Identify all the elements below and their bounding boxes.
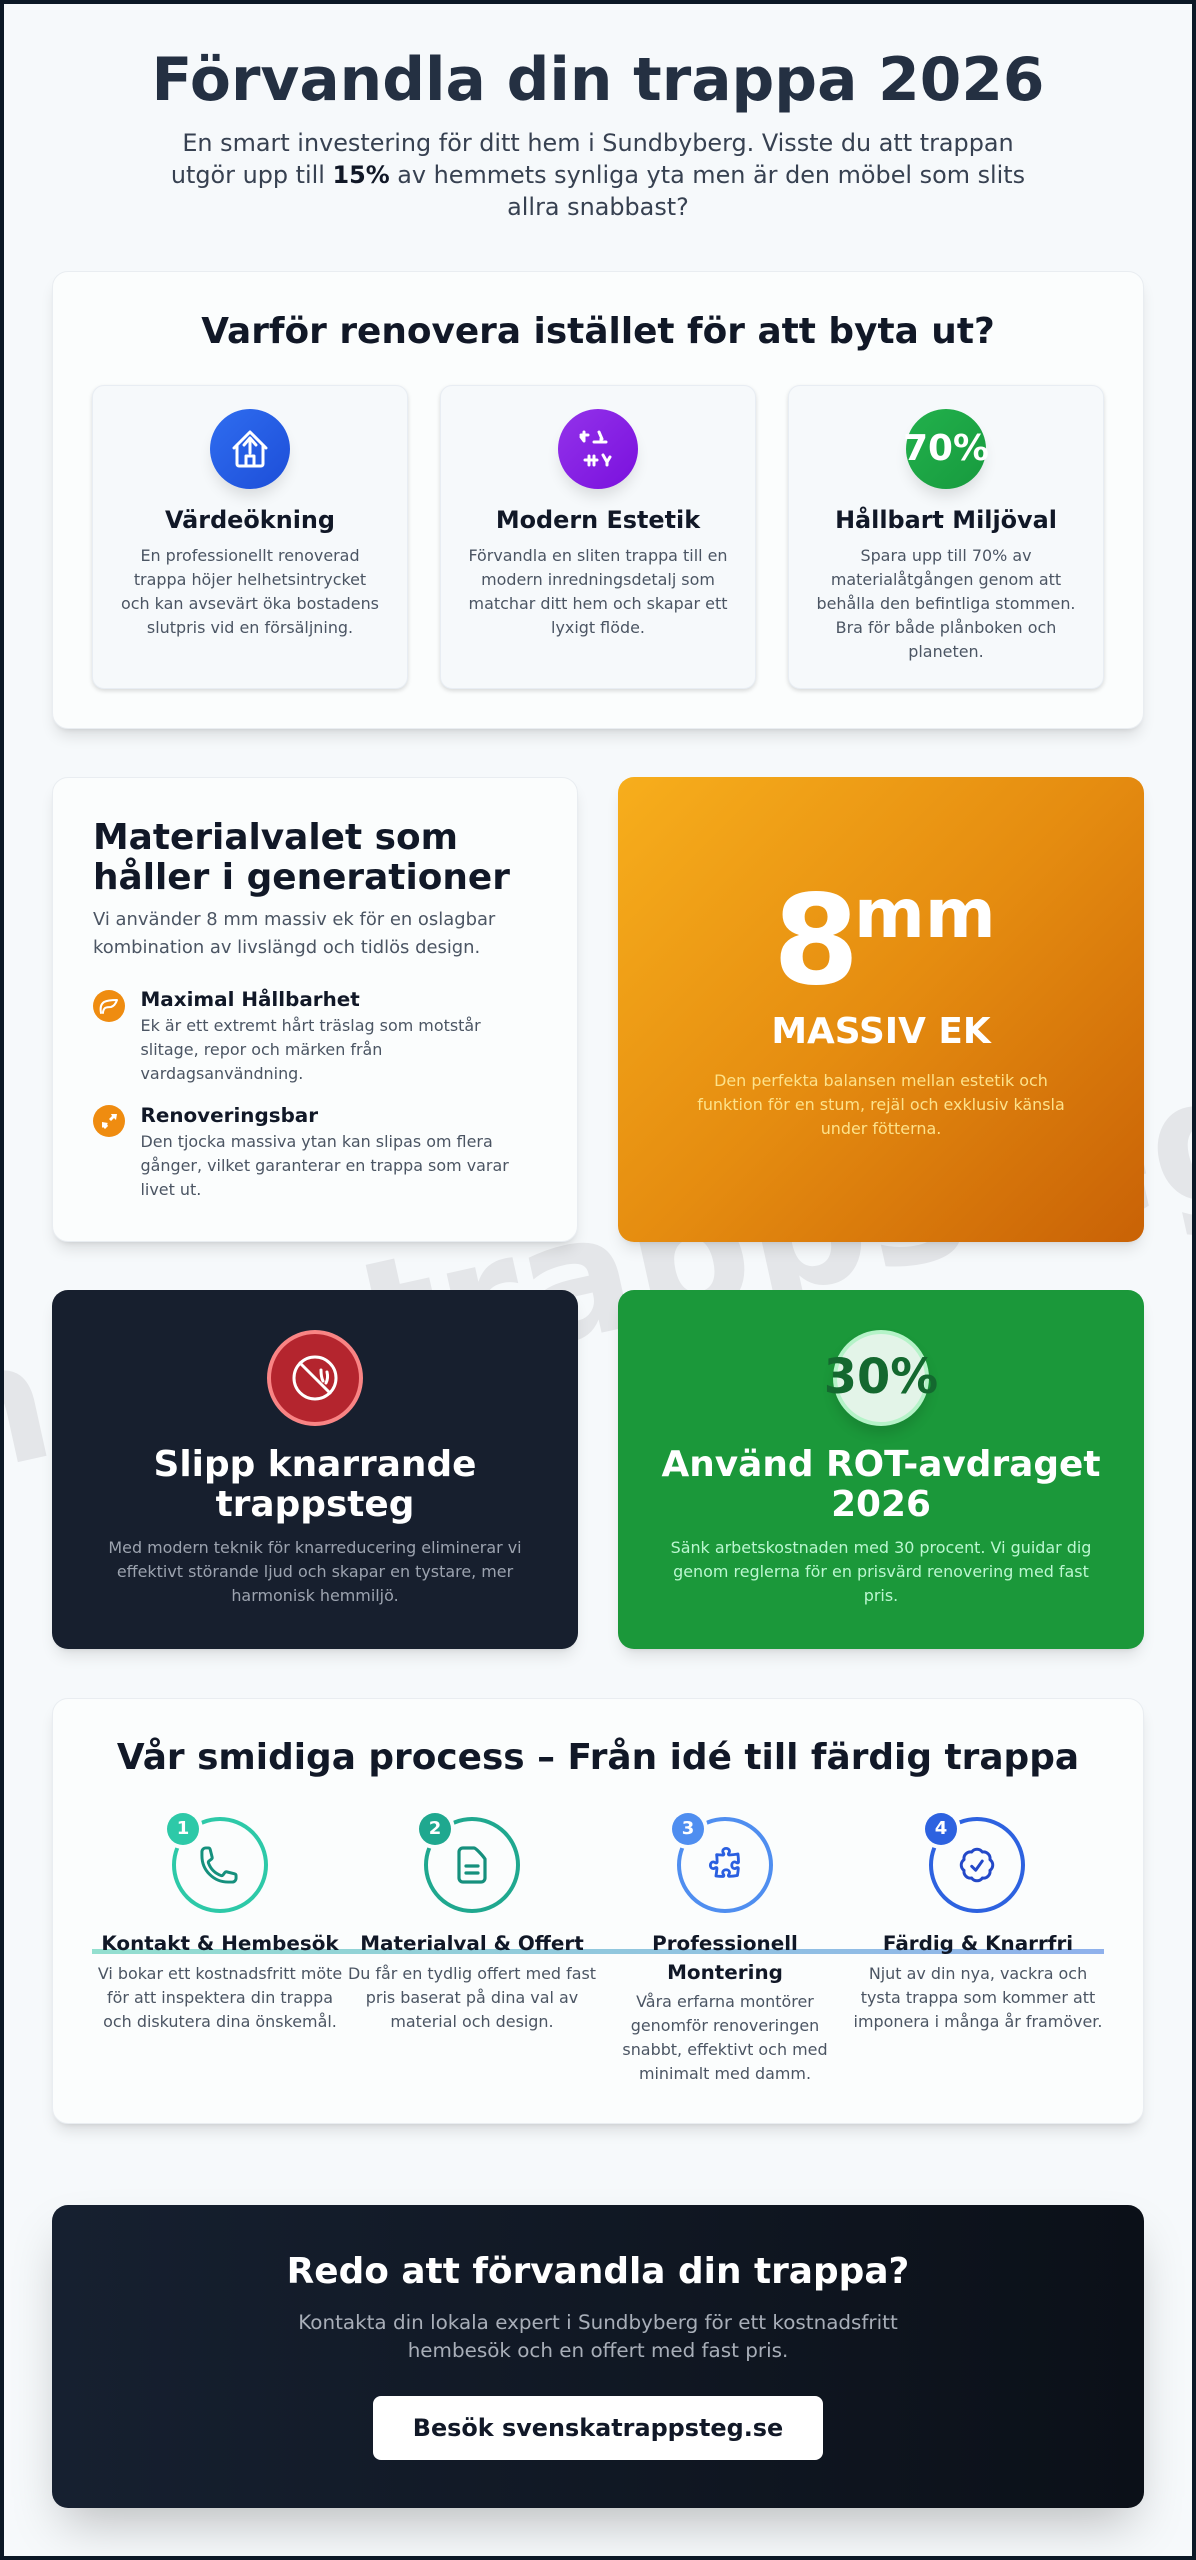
intro text: utgör upp till 15% av hemmets synliga yta men är den möbel som slits [171,161,1025,189]
card text: Bra för både plånboken och [836,618,1056,637]
icon: no squeak [267,1330,363,1426]
icon: 70 percent: 70% [903,428,989,469]
intro text: En smart investering för ditt hem i Sundbyberg. Visste du att trappan [182,129,1014,157]
icon: 30 percent [833,1330,929,1426]
card text: trappa höjer helhetsintrycket [134,570,366,589]
card title: Hållbart Miljöval [835,506,1057,534]
step 3 title [652,1932,798,1984]
feature text: renovatable: gånger, vilket garanterar en trappa som varar [140,1156,509,1175]
step 2 text: Du får en tydlig offert med fast [348,1964,596,1983]
heading: process: Vår smidiga process – Från idé till färdig trappa [117,1737,1079,1778]
feature text: durability [140,1016,481,1083]
card title: Slipp knarrande [154,1444,476,1485]
feature text: durability: Ek är ett extremt hårt träslag som motstår [140,1016,481,1035]
card text: harmonisk hemmiljö. [231,1586,399,1605]
intro text [171,129,1025,221]
card title: Värdeökning [165,506,335,534]
card text: planeten. [908,642,984,661]
step 4 text: imponera i många år framöver. [854,2012,1102,2031]
icon: durability [93,990,125,1022]
card text: Förvandla en sliten trappa till en [468,546,728,565]
step 3 text: genomför renoveringen [631,2016,819,2035]
step 3 ring [677,1817,773,1913]
step 3 title: Montering [667,1961,783,1984]
card text: Sänk arbetskostnaden med 30 procent. Vi guidar dig [671,1538,1091,1557]
card text: slutpris vid en försäljning. [147,618,353,637]
icon: 70 percent [906,409,986,489]
step 2 title: Materialval & Offert [360,1932,584,1955]
card text: Med modern teknik för knarreducering eliminerar vi [108,1538,522,1557]
heading: material: Materialvalet som [93,817,458,858]
card text: lyxigt flöde. [551,618,645,637]
card text: genom reglerna för en prisvärd renovering med fast [673,1562,1089,1581]
step 4 ring [929,1817,1025,1913]
step 4 title: Färdig & Knarrfri [883,1932,1073,1955]
icon: house with arrow [210,409,290,489]
icon: renovatable [93,1105,125,1137]
oak text: under fötterna. [821,1119,941,1138]
button: Besök svenskatrappsteg.se [413,2414,783,2442]
call to action text: hembesök och en offert med fast pris. [408,2339,788,2362]
card text: modern inredningsdetalj som [481,570,715,589]
card: sustainable choice [788,385,1104,689]
step 3 text: Våra erfarna montörer [636,1992,814,2011]
card text: effektivt störande ljud och skapar en tystare, mer [117,1562,513,1581]
card text [108,1538,522,1605]
panel: call to action [52,2205,1144,2508]
title: Förvandla din trappa 2026 [152,46,1044,115]
step 2 badge: 2 [429,1818,441,1839]
oak text: Den perfekta balansen mellan estetik och [714,1071,1048,1090]
step 3 text [622,1992,828,2083]
panel: 8 mm solid oak [618,777,1144,1242]
unit: mm [854,875,996,954]
feature title: durability: Maximal Hållbarhet [140,988,360,1011]
card title [662,1444,1100,1525]
step 2 ring [424,1817,520,1913]
panel: squeak free [52,1290,578,1649]
heading: material: håller i generationer [93,857,510,898]
step 4 text: Njut av din nya, vackra och [869,1964,1087,1983]
card text: pris. [864,1586,898,1605]
big number: 8 [773,869,859,1013]
panel: material [52,777,578,1242]
icon: 30 percent: 30% [824,1350,938,1405]
step 2 text: material och design. [390,2012,554,2031]
card text [671,1538,1091,1605]
card title: 2026 [831,1484,931,1525]
card: modern aesthetics [440,385,756,689]
icon: sparkle arrows [558,409,638,489]
step 2 text: pris baserat på dina val av [366,1988,578,2007]
card title: Använd ROT-avdraget [662,1444,1100,1485]
step 1 text: Vi bokar ett kostnadsfritt möte [98,1964,342,1983]
heading: call to action: Redo att förvandla din trappa? [287,2251,909,2292]
feature text: durability: slitage, repor och märken från [140,1040,382,1059]
card text: En professionellt renoverad [140,546,360,565]
step 4 text: tysta trappa som kommer att [861,1988,1095,2007]
step 4 badge [925,1813,957,1845]
icon: check badge [960,1848,994,1882]
oak label: MASSIV EK [771,1011,991,1052]
step 3 badge: 3 [682,1818,694,1839]
card title: Modern Estetik [496,506,700,534]
card title [154,1444,476,1525]
card title: trappsteg [216,1484,414,1525]
feature text: renovatable: livet ut. [140,1180,201,1199]
icon: phone [200,1846,238,1884]
card: value increase [92,385,408,689]
step 3 title: Professionell [652,1932,798,1955]
call to action text [298,2311,898,2362]
timeline line [92,1949,1104,1954]
feature text: durability: vardagsanvändning. [140,1064,303,1083]
card text [816,546,1076,661]
intro text: allra snabbast? [507,193,689,221]
step 3 badge [672,1813,704,1845]
material intro text: Vi använder 8 mm massiv ek för en oslagbar [93,909,495,930]
card text: behålla den befintliga stommen. [816,594,1076,613]
step 3 text: snabbt, effektivt och med [622,2040,828,2059]
step 1 badge: 1 [177,1818,189,1839]
heading: why renovate: Varför renovera istället för att byta ut? [201,311,995,352]
step 4 badge: 4 [935,1818,947,1839]
icon: document [457,1846,487,1884]
step 2 badge [419,1813,451,1845]
step 1 badge [167,1813,199,1845]
panel: process [52,1698,1144,2124]
material intro text: kombination av livslängd och tidlös design. [93,937,480,958]
card text: och kan avsevärt öka bostadens [121,594,379,613]
icon: puzzle piece [708,1847,740,1878]
feature title: renovatable: Renoveringsbar [140,1104,318,1127]
step 3 text: minimalt med damm. [639,2064,811,2083]
card text: matchar ditt hem och skapar ett [469,594,727,613]
oak text [697,1071,1065,1138]
step 1 ring [172,1817,268,1913]
step 4 text [854,1964,1102,2031]
feature text: renovatable [140,1132,509,1199]
panel: why renovate [52,271,1144,729]
material intro text [93,909,496,958]
step 1 title: Kontakt & Hembesök [101,1932,339,1955]
card text: materialåtgången genom att [831,570,1061,589]
feature text: renovatable: Den tjocka massiva ytan kan slipas om flera [140,1132,493,1151]
step 1 text: för att inspektera din trappa [107,1988,333,2007]
card text: Spara upp till 70% av [860,546,1032,565]
card text [121,546,379,637]
card text [468,546,728,637]
step 2 text [348,1964,596,2031]
panel: ROT deduction [618,1290,1144,1649]
step 1 text [98,1964,342,2031]
heading: material [93,817,510,898]
button [373,2396,823,2460]
oak text: funktion för en stum, rejäl och exklusiv känsla [697,1095,1065,1114]
call to action text: Kontakta din lokala expert i Sundbyberg för ett kostnadsfritt [298,2311,898,2334]
step 1 text: och diskutera dina önskemål. [103,2012,337,2031]
